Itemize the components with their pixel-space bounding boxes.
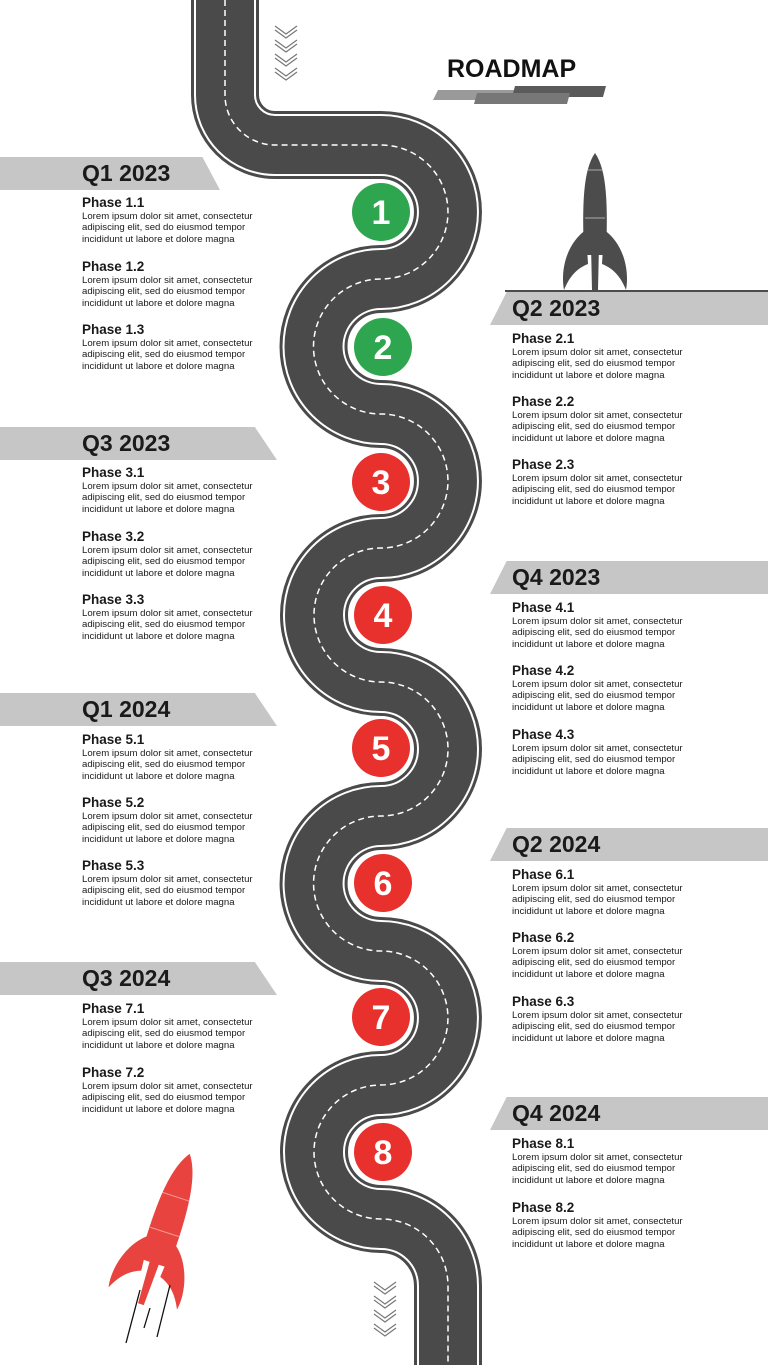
phase 5.1 (82, 732, 253, 782)
icon: chevrons bottom (374, 1282, 396, 1336)
phase 4.2: incididunt ut labore et dolore magna (512, 702, 665, 713)
phase 2.1: Lorem ipsum dolor sit amet, consectetur (512, 347, 683, 358)
phase 3.1: Phase 3.1 (82, 465, 144, 480)
phase 6.1 (512, 867, 683, 917)
milestone 5 (349, 716, 413, 780)
phase 4.2: Phase 4.2 (512, 663, 574, 678)
phase 7.2 (82, 1065, 253, 1115)
phase 2.2: adipiscing elit, sed do eiusmod tempor (512, 421, 675, 432)
phase 6.2: incididunt ut labore et dolore magna (512, 969, 665, 980)
phase 8.2: Lorem ipsum dolor sit amet, consectetur (512, 1216, 683, 1227)
black line over Q2 2023 (505, 290, 768, 292)
phase 2.3: Phase 2.3 (512, 457, 574, 472)
banner: Q3 2024 (0, 962, 277, 995)
phase 5.2 (82, 795, 253, 845)
phase 6.3 (512, 994, 683, 1044)
phase 1.3: Phase 1.3 (82, 322, 144, 337)
phase 8.1: Phase 8.1 (512, 1136, 574, 1151)
phase 1.2: Lorem ipsum dolor sit amet, consectetur (82, 275, 253, 286)
phase 5.2: incididunt ut labore et dolore magna (82, 834, 235, 845)
phase 7.2: incididunt ut labore et dolore magna (82, 1104, 235, 1115)
icon: red rocket (106, 1143, 225, 1316)
text: Q1 2024 (82, 696, 170, 722)
text: Q4 2024 (512, 1100, 600, 1126)
milestone 7: 7 (372, 999, 390, 1037)
banner: Q2 2024 (490, 828, 768, 861)
phase 3.2: Lorem ipsum dolor sit amet, consectetur (82, 545, 253, 556)
phase 2.3: adipiscing elit, sed do eiusmod tempor (512, 484, 675, 495)
phase 4.3 (512, 727, 683, 777)
phase 5.3: incididunt ut labore et dolore magna (82, 897, 235, 908)
phase 4.1: Phase 4.1 (512, 600, 574, 615)
phase 2.2 (512, 394, 683, 444)
phase 8.2: Phase 8.2 (512, 1200, 574, 1215)
phase 7.1: adipiscing elit, sed do eiusmod tempor (82, 1028, 245, 1039)
phase 1.3: incididunt ut labore et dolore magna (82, 361, 235, 372)
phase 4.3: Lorem ipsum dolor sit amet, consectetur (512, 743, 683, 754)
phase 7.1: incididunt ut labore et dolore magna (82, 1040, 235, 1051)
phase 6.3: Lorem ipsum dolor sit amet, consectetur (512, 1010, 683, 1021)
milestone 6: 6 (374, 865, 392, 903)
phase 2.2: Lorem ipsum dolor sit amet, consectetur (512, 410, 683, 421)
phase 1.1: Lorem ipsum dolor sit amet, consectetur (82, 211, 253, 222)
phase 2.1: Phase 2.1 (512, 331, 574, 346)
phase 7.1: Phase 7.1 (82, 1001, 144, 1016)
text: Q3 2024 (82, 965, 170, 991)
title: ROADMAP (447, 55, 576, 83)
phase 5.3 (82, 858, 253, 908)
phase 1.2 (82, 259, 253, 309)
milestone 1 (349, 180, 413, 244)
title underline bars (433, 86, 606, 104)
phase 7.1: Lorem ipsum dolor sit amet, consectetur (82, 1017, 253, 1028)
phase 2.1 (512, 331, 683, 381)
phase 6.2: Lorem ipsum dolor sit amet, consectetur (512, 946, 683, 957)
phase 3.1: incididunt ut labore et dolore magna (82, 504, 235, 515)
phase 6.1: incididunt ut labore et dolore magna (512, 906, 665, 917)
milestone 3: 3 (372, 464, 390, 502)
phase 6.2 (512, 930, 683, 980)
phase 3.2: Phase 3.2 (82, 529, 144, 544)
phase 6.1: Lorem ipsum dolor sit amet, consectetur (512, 883, 683, 894)
phase 4.3: incididunt ut labore et dolore magna (512, 766, 665, 777)
banner: Q1 2023 (0, 157, 220, 190)
icon: gray rocket (563, 153, 627, 290)
phase 4.3: Phase 4.3 (512, 727, 574, 742)
phase 4.2: adipiscing elit, sed do eiusmod tempor (512, 690, 675, 701)
phase 3.1: adipiscing elit, sed do eiusmod tempor (82, 492, 245, 503)
milestone 3 (349, 450, 413, 514)
milestone 2: 2 (374, 329, 392, 367)
banner: Q4 2024 (490, 1097, 768, 1130)
phase 1.2: incididunt ut labore et dolore magna (82, 298, 235, 309)
phase 5.1: adipiscing elit, sed do eiusmod tempor (82, 759, 245, 770)
phase 3.3: Phase 3.3 (82, 592, 144, 607)
phase 1.3: Lorem ipsum dolor sit amet, consectetur (82, 338, 253, 349)
phase 5.1: Phase 5.1 (82, 732, 144, 747)
text: Q2 2023 (512, 295, 600, 321)
phase 2.1: incididunt ut labore et dolore magna (512, 370, 665, 381)
phase 6.1: Phase 6.1 (512, 867, 574, 882)
phase 3.2 (82, 529, 253, 579)
phase 2.3 (512, 457, 683, 507)
phase 6.2: adipiscing elit, sed do eiusmod tempor (512, 957, 675, 968)
phase 5.1: incididunt ut labore et dolore magna (82, 771, 235, 782)
phase 3.1 (82, 465, 253, 515)
phase 6.3: incididunt ut labore et dolore magna (512, 1033, 665, 1044)
phase 7.1 (82, 1001, 253, 1051)
phase 4.1: Lorem ipsum dolor sit amet, consectetur (512, 616, 683, 627)
phase 4.2: Lorem ipsum dolor sit amet, consectetur (512, 679, 683, 690)
phase 1.1: Phase 1.1 (82, 195, 144, 210)
phase 8.1: adipiscing elit, sed do eiusmod tempor (512, 1163, 675, 1174)
phase 2.2: incididunt ut labore et dolore magna (512, 433, 665, 444)
phase 5.3: adipiscing elit, sed do eiusmod tempor (82, 885, 245, 896)
phase 8.1: incididunt ut labore et dolore magna (512, 1175, 665, 1186)
phase 6.3: adipiscing elit, sed do eiusmod tempor (512, 1021, 675, 1032)
milestone 8: 8 (374, 1134, 392, 1172)
milestone 6 (351, 851, 415, 915)
phase 4.1 (512, 600, 683, 650)
banner: Q4 2023 (490, 561, 768, 594)
banner: Q1 2024 (0, 693, 277, 726)
phase 4.1: incididunt ut labore et dolore magna (512, 639, 665, 650)
milestone 5: 5 (372, 730, 390, 768)
phase 8.2 (512, 1200, 683, 1250)
text: Q3 2023 (82, 430, 170, 456)
phase 7.2: Phase 7.2 (82, 1065, 144, 1080)
milestone 1: 1 (372, 194, 390, 232)
phase 4.1: adipiscing elit, sed do eiusmod tempor (512, 627, 675, 638)
phase 8.1 (512, 1136, 683, 1186)
phase 6.1: adipiscing elit, sed do eiusmod tempor (512, 894, 675, 905)
milestone 4: 4 (374, 597, 393, 635)
phase 1.1: incididunt ut labore et dolore magna (82, 234, 235, 245)
milestone 4 (351, 583, 415, 647)
phase 5.1: Lorem ipsum dolor sit amet, consectetur (82, 748, 253, 759)
phase 8.2: incididunt ut labore et dolore magna (512, 1239, 665, 1250)
phase 5.3: Lorem ipsum dolor sit amet, consectetur (82, 874, 253, 885)
phase 1.1: adipiscing elit, sed do eiusmod tempor (82, 222, 245, 233)
phase 3.2: adipiscing elit, sed do eiusmod tempor (82, 556, 245, 567)
phase 8.2: adipiscing elit, sed do eiusmod tempor (512, 1227, 675, 1238)
banner: Q3 2023 (0, 427, 277, 460)
phase 3.3: Lorem ipsum dolor sit amet, consectetur (82, 608, 253, 619)
phase 3.1: Lorem ipsum dolor sit amet, consectetur (82, 481, 253, 492)
phase 2.1: adipiscing elit, sed do eiusmod tempor (512, 358, 675, 369)
phase 5.2: Lorem ipsum dolor sit amet, consectetur (82, 811, 253, 822)
phase 1.3: adipiscing elit, sed do eiusmod tempor (82, 349, 245, 360)
milestone 2 (351, 315, 415, 379)
phase 3.2: incididunt ut labore et dolore magna (82, 568, 235, 579)
phase 6.3: Phase 6.3 (512, 994, 574, 1009)
phase 3.3: incididunt ut labore et dolore magna (82, 631, 235, 642)
text: Q1 2023 (82, 160, 170, 186)
speed lines (126, 1285, 170, 1343)
phase 4.3: adipiscing elit, sed do eiusmod tempor (512, 754, 675, 765)
text: Q4 2023 (512, 564, 600, 590)
phase 3.3 (82, 592, 253, 642)
phase 1.2: Phase 1.2 (82, 259, 144, 274)
phase 7.2: adipiscing elit, sed do eiusmod tempor (82, 1092, 245, 1103)
phase 5.2: adipiscing elit, sed do eiusmod tempor (82, 822, 245, 833)
phase 4.2 (512, 663, 683, 713)
phase 1.2: adipiscing elit, sed do eiusmod tempor (82, 286, 245, 297)
phase 2.3: Lorem ipsum dolor sit amet, consectetur (512, 473, 683, 484)
milestone 8 (351, 1120, 415, 1184)
milestone 7 (349, 985, 413, 1049)
banner: Q2 2023 (490, 292, 768, 325)
text: Q2 2024 (512, 831, 600, 857)
phase 8.1: Lorem ipsum dolor sit amet, consectetur (512, 1152, 683, 1163)
phase 2.2: Phase 2.2 (512, 394, 574, 409)
phase 2.3: incididunt ut labore et dolore magna (512, 496, 665, 507)
phase 7.2: Lorem ipsum dolor sit amet, consectetur (82, 1081, 253, 1092)
phase 1.1 (82, 195, 253, 245)
phase 1.3 (82, 322, 253, 372)
phase 5.3: Phase 5.3 (82, 858, 144, 873)
phase 6.2: Phase 6.2 (512, 930, 574, 945)
phase 5.2: Phase 5.2 (82, 795, 144, 810)
icon: chevrons top (275, 26, 297, 80)
phase 3.3: adipiscing elit, sed do eiusmod tempor (82, 619, 245, 630)
